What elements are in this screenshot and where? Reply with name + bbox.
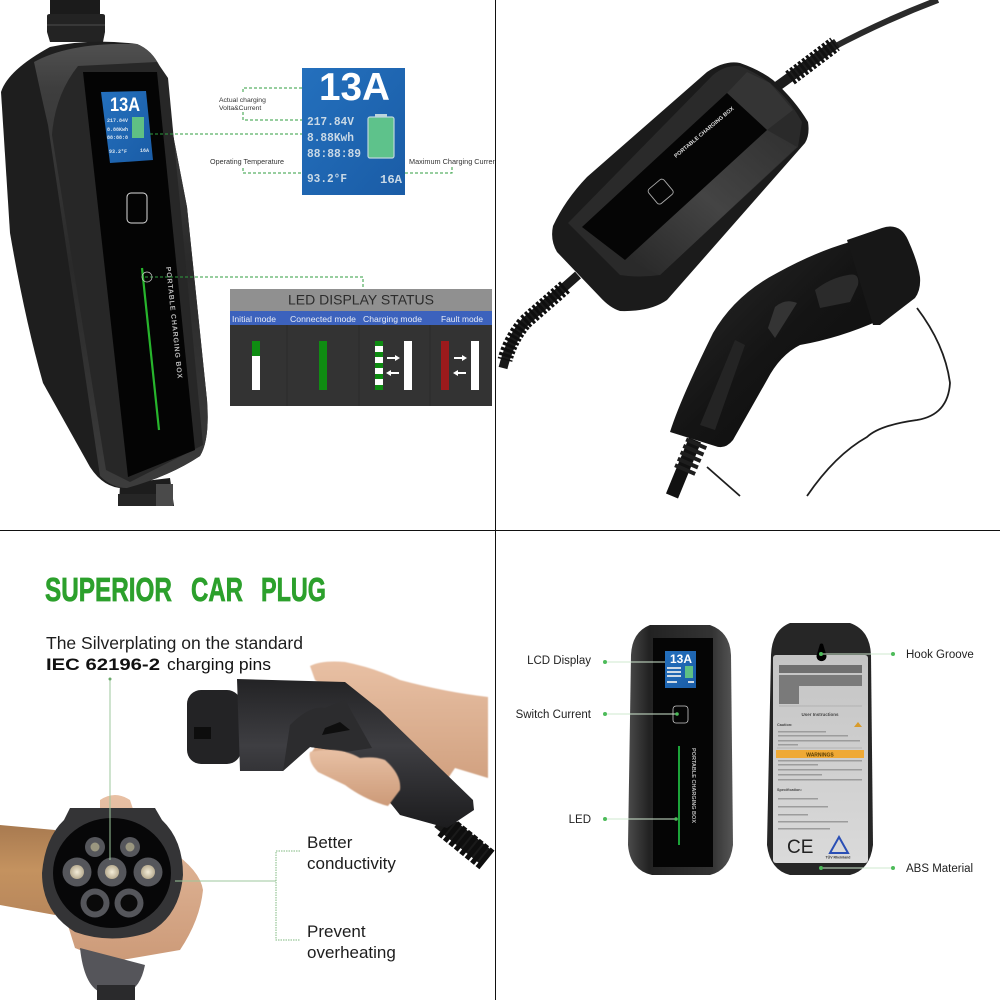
zoomed display: 8.88Kwh <box>307 131 354 145</box>
lcd screen: 13A <box>670 652 692 666</box>
plug body <box>670 242 880 447</box>
power pins <box>62 858 162 918</box>
hand behind socket <box>60 795 203 962</box>
black panel <box>582 93 767 260</box>
switch button <box>647 178 674 205</box>
title: PLUG <box>261 571 326 608</box>
initial mode indicator <box>252 341 260 390</box>
table: LED display status <box>230 289 492 406</box>
side view plug <box>187 679 474 828</box>
inner bevel <box>52 62 203 482</box>
panel: superior car plug <box>0 571 488 1000</box>
callout lines <box>108 678 300 940</box>
icon: bottom cable gland <box>118 478 174 506</box>
callout: prevent overheating: Prevent <box>307 922 366 941</box>
spec sticker: TÜV Rheinland <box>826 856 850 860</box>
plug highlights <box>700 274 858 430</box>
callout leader lines <box>605 654 893 868</box>
callout: prevent overheating: overheating <box>307 943 396 962</box>
spec sticker: Specification: <box>777 788 802 792</box>
plug cable <box>440 820 487 860</box>
mode labels: Fault mode <box>441 314 483 324</box>
standard name: charging pins <box>167 655 271 674</box>
lcd screen <box>665 651 696 688</box>
strain relief bottom <box>503 275 578 368</box>
title: SUPERIOR <box>45 571 172 608</box>
spec sticker: WARNINGS <box>806 752 834 758</box>
icon: battery <box>368 114 394 158</box>
front view of box <box>628 625 733 875</box>
bevel <box>568 66 802 276</box>
description: The Silverplating on the standard <box>46 633 303 653</box>
strain relief top <box>775 43 837 88</box>
fingers on plug <box>310 750 400 806</box>
plug grommet and cable <box>672 440 697 496</box>
lcd screen: 88:88:8 <box>107 135 128 141</box>
hook groove <box>816 644 826 661</box>
callout: maximum charging current: Maximum Charging Current <box>409 157 499 166</box>
mode labels: Charging mode <box>363 314 422 324</box>
standard name: IEC 62196-2 <box>46 655 160 674</box>
forearm <box>0 825 55 915</box>
lcd screen: 217.84V <box>107 118 128 124</box>
spec sticker: Caution: <box>777 723 792 727</box>
lcd screen: 8.88Kwh <box>107 127 128 133</box>
mode labels <box>232 314 483 324</box>
mode labels: Connected mode <box>290 314 356 324</box>
charging mode indicator <box>375 341 412 390</box>
reflective band <box>625 130 797 275</box>
charging box rotated <box>552 62 809 311</box>
switch button <box>673 706 688 723</box>
thin pilot cable <box>707 308 950 496</box>
led bar <box>142 268 159 430</box>
top gloss <box>727 72 793 130</box>
certification marks: CE <box>787 837 813 858</box>
switch button <box>127 193 147 223</box>
socket face <box>42 808 183 938</box>
plug head <box>847 226 920 325</box>
small pins <box>85 837 140 857</box>
main cable <box>832 0 938 48</box>
led bar <box>678 746 680 845</box>
zoomed display: 217.84V <box>307 115 355 129</box>
grommet <box>80 948 145 1000</box>
hand holding plug from above <box>310 662 488 807</box>
device label: PORTABLE CHARGING BOX <box>690 748 696 823</box>
label: LCD display: LCD Display <box>527 655 591 667</box>
lcd screen: 16A <box>140 148 149 154</box>
label: LED: LED <box>569 814 591 826</box>
zoomed display: 16A <box>380 173 403 187</box>
title: CAR <box>191 571 243 608</box>
fault mode indicator <box>441 341 479 390</box>
lcd screen: 93.2°F <box>109 149 127 155</box>
panel: front and back product diagram <box>516 623 974 875</box>
charging box body <box>1 42 208 488</box>
icon: top cable gland <box>47 0 105 42</box>
spec sticker: User Instructions <box>801 712 839 717</box>
device label: PORTABLE CHARGING BOX <box>673 106 736 160</box>
black front panel <box>83 72 195 477</box>
label: hook groove: Hook Groove <box>906 649 974 661</box>
lcd screen: 13A <box>110 95 140 116</box>
callout: better conductivity: conductivity <box>307 854 396 873</box>
title <box>45 571 326 608</box>
callout dots <box>603 652 895 870</box>
zoomed display <box>302 66 405 195</box>
callout: better conductivity: Better <box>307 833 353 852</box>
zoomed display: 93.2°F <box>307 172 347 186</box>
label: switch current: Switch Current <box>516 709 592 721</box>
back view of box <box>767 623 873 875</box>
zoomed display: 13A <box>319 66 390 109</box>
spec sticker <box>773 655 868 863</box>
top cap and side rim <box>34 44 208 488</box>
table heading: LED DISPLAY STATUS <box>288 292 434 308</box>
mode labels: Initial mode <box>232 314 276 324</box>
zoomed display: 88:88:89 <box>307 147 361 161</box>
lcd screen <box>101 91 153 163</box>
callout: actual charging: Actual charging <box>219 97 266 104</box>
callout lines <box>142 88 452 289</box>
device label: PORTABLE CHARGING BOX <box>164 266 183 379</box>
callout: operating temperature: Operating Temperature <box>210 157 284 166</box>
label: ABS material: ABS Material <box>906 863 973 875</box>
connected mode indicator <box>319 341 327 390</box>
panel: LCD and LED detail of charging box <box>1 0 499 506</box>
callout: actual charging: Volta&Current <box>219 105 261 112</box>
panel: charging box and plug product photo <box>503 0 950 496</box>
